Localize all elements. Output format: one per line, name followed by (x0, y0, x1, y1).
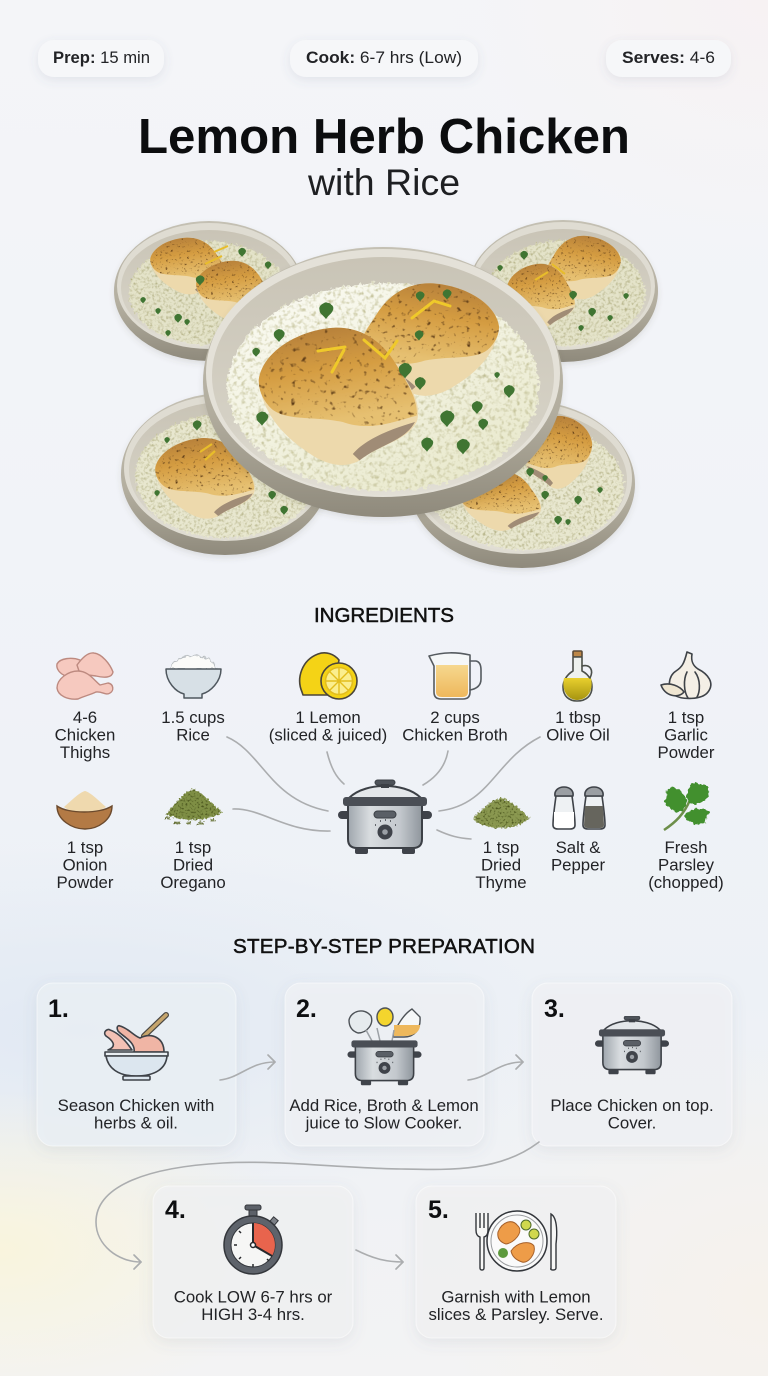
icon: parsley sprig (664, 782, 709, 830)
label: Fresh (665, 838, 707, 857)
icon: stopwatch (224, 1205, 282, 1274)
label: 1 tsp (175, 838, 211, 857)
label: Onion (63, 856, 107, 874)
step 4 card (153, 1186, 353, 1338)
step 4 card: HIGH 3-4 hrs. (201, 1305, 305, 1324)
step 5 card: slices & Parsley. Serve. (428, 1305, 604, 1324)
title: with Rice (307, 161, 460, 203)
bowl: top left (114, 221, 304, 361)
label: 1 tsp (483, 838, 519, 857)
heading: ingredients: INGREDIENTS (314, 604, 454, 627)
label: Rice (176, 726, 210, 744)
step 1 card: Season Chicken with (58, 1096, 214, 1115)
icon: plate with fork and knife (476, 1211, 557, 1271)
label: Thyme (475, 873, 527, 892)
label: Chicken Broth (402, 726, 508, 744)
label: Oregano (160, 873, 226, 892)
pill: servings: Serves: 4-6 (622, 49, 715, 67)
pill: servings (606, 40, 731, 77)
pill: prep time (38, 40, 164, 77)
step 1 card: 1. (48, 995, 69, 1023)
bowl: centre (203, 247, 563, 517)
ingredient: salt and pepper (551, 787, 605, 874)
label: Powder (57, 873, 114, 892)
label: 1 Lemon (295, 708, 361, 727)
label: Parsley (658, 856, 715, 874)
ingredient: rice (161, 655, 225, 744)
step 3 card: Cover. (608, 1114, 656, 1132)
label: 2 cups (430, 708, 480, 727)
step 2 card: 2. (296, 995, 317, 1023)
pill: cook time: Cook: 6-7 hrs (Low) (306, 49, 462, 67)
label: 4-6 (73, 708, 97, 727)
step 4 card: 4. (165, 1196, 186, 1224)
ingredient: onion powder (57, 791, 114, 892)
icon: thyme pile (473, 798, 530, 828)
title: Lemon Herb Chicken (138, 109, 630, 164)
arrow: step 1 to 2 (220, 1055, 275, 1080)
label: Salt & (556, 838, 600, 857)
title (138, 109, 630, 203)
icon: chicken in bowl (105, 1015, 168, 1080)
label: 1 tbsp (555, 708, 601, 727)
ingredient: chicken thighs (55, 653, 115, 762)
step 2 card: Add Rice, Broth & Lemon (289, 1096, 479, 1115)
arrow: step 3 to 4 (96, 1142, 539, 1269)
step 5 card (416, 1186, 616, 1338)
icon: bowl of rice (166, 655, 221, 698)
step 3 card (532, 983, 732, 1146)
label: (sliced & juiced) (269, 726, 387, 744)
ingredient: dried oregano (160, 789, 226, 892)
bowl: bottom left (121, 393, 329, 555)
parsley flecks (252, 289, 515, 454)
ingredient: garlic powder (658, 652, 715, 762)
step 5 card: 5. (428, 1196, 449, 1224)
ingredient: fresh parsley (648, 782, 724, 892)
step 3 card: 3. (544, 995, 565, 1023)
label: 1.5 cups (161, 708, 225, 727)
bowl: top right (468, 220, 658, 362)
lemon zest (318, 301, 450, 372)
step 5 card: Garnish with Lemon (441, 1288, 591, 1306)
pill: cook time (290, 40, 478, 77)
ingredient: lemon (269, 653, 387, 744)
icon: covered slow cooker (595, 1016, 669, 1074)
label: 1 tsp (668, 708, 704, 727)
icon: central slow cooker (338, 780, 432, 854)
label: Powder (658, 743, 715, 762)
arrow: step 2 to 3 (468, 1055, 523, 1080)
step 3 card: Place Chicken on top. (550, 1096, 714, 1115)
label: Chicken (55, 726, 115, 744)
icon: oil bottle (563, 651, 592, 701)
icon: oregano pile (165, 789, 222, 823)
label: Olive Oil (546, 726, 610, 744)
icon: whole and sliced lemon (300, 653, 357, 699)
chicken thigh: left (259, 328, 418, 465)
label: Dried (173, 856, 213, 874)
label: Garlic (664, 726, 708, 744)
label: Dried (481, 856, 521, 874)
ingredient: dried thyme (473, 798, 530, 892)
icon: ingredients pouring into cooker (347, 1008, 422, 1085)
heading: step-by-step preparation: STEP-BY-STEP PREPARATION (233, 935, 535, 958)
bowl: bottom right (409, 400, 635, 568)
label: Thighs (60, 743, 110, 762)
connector lines from ingredients to slow cooker (227, 737, 540, 839)
arrow: step 4 to 5 (356, 1250, 403, 1269)
icon: measuring jug (429, 653, 481, 699)
step 2 card (285, 983, 484, 1146)
chicken thigh: right (358, 283, 499, 396)
icon: bowl of onion powder (57, 791, 112, 829)
label: (chopped) (648, 873, 724, 892)
ingredient: olive oil (546, 651, 610, 744)
step 4 card: Cook LOW 6-7 hrs or (174, 1288, 333, 1306)
icon: shakers (553, 787, 605, 829)
step 1 card: herbs & oil. (94, 1114, 178, 1132)
icon: garlic bulb (661, 652, 711, 698)
label: 1 tsp (67, 838, 103, 857)
step 1 card (37, 983, 236, 1146)
ingredient: chicken broth (402, 653, 508, 744)
step 2 card: juice to Slow Cooker. (305, 1114, 462, 1132)
label: Pepper (551, 856, 605, 874)
icon: raw chicken (57, 653, 113, 699)
hero image: bowls of lemon herb chicken and rice (114, 220, 658, 568)
pill: prep time: Prep: 15 min (53, 49, 150, 67)
